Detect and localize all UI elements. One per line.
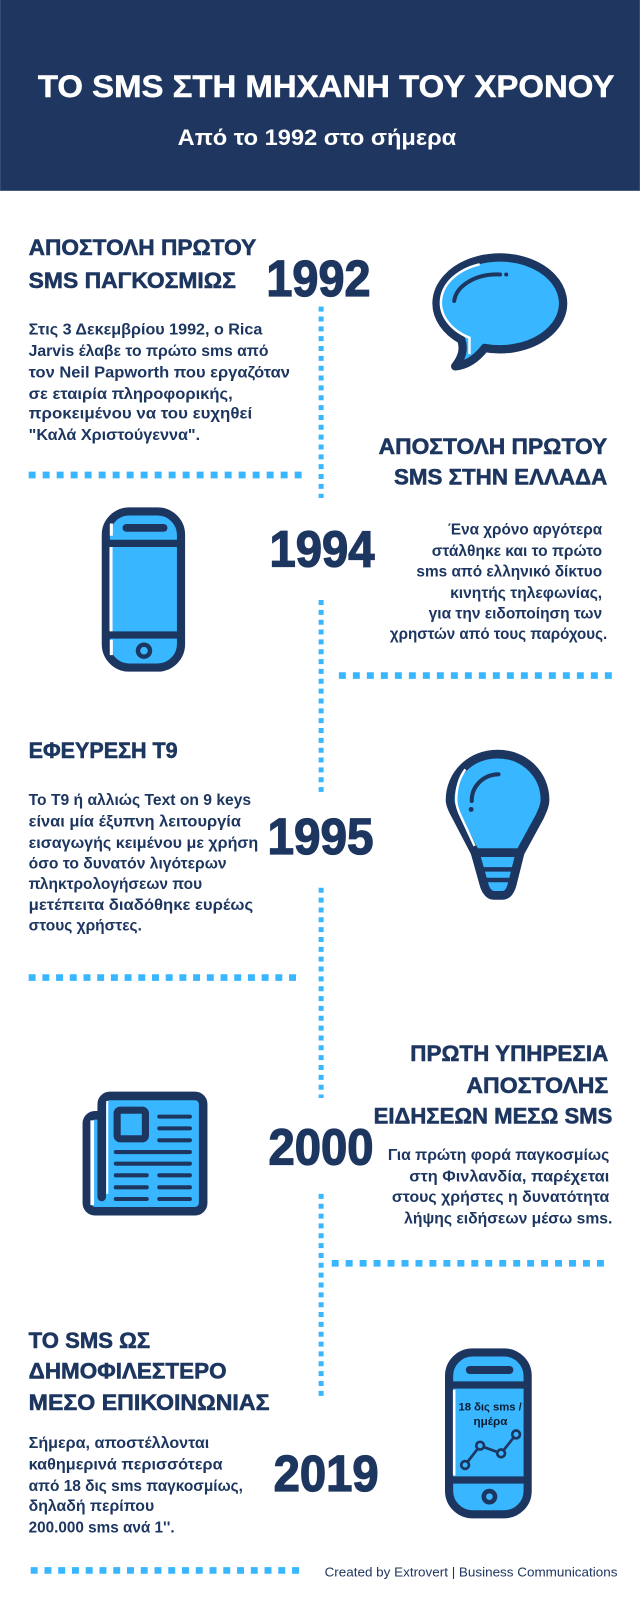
footer credit: Created by Extrovert | Business Communications — [325, 1565, 617, 1580]
heading: ΔΗΜΟΦΙΛΕΣΤΕΡΟ — [29, 1359, 227, 1384]
heading: ΑΠΟΣΤΟΛΗΣ — [466, 1073, 608, 1098]
heading: ΑΠΟΣΤΟΛΗ ΠΡΩΤΟΥ — [379, 434, 607, 459]
icon: newspaper — [87, 1096, 203, 1211]
timeline vertical segments — [319, 307, 324, 1400]
body text: Στις 3 Δεκεμβρίου 1992, ο Rica — [29, 322, 263, 339]
body text: από 18 δις sms παγκοσμίως, — [29, 1478, 243, 1495]
heading — [29, 1328, 269, 1415]
body text: δηλαδή περίπου — [29, 1498, 154, 1515]
body text: Το Τ9 ή αλλιώς Text on 9 keys — [29, 792, 251, 809]
screen label: ημέρα — [473, 1416, 508, 1428]
body text: τον Neil Papworth που εργαζόταν — [29, 365, 290, 382]
year: 1994 — [269, 520, 375, 577]
header banner — [0, 0, 640, 191]
icon: speech bubble — [437, 257, 563, 366]
icon: mobile phone — [106, 511, 181, 668]
body text: στη Φινλανδία, παρέχεται — [409, 1169, 609, 1186]
section: 1994 — [106, 434, 607, 668]
icon: light bulb — [450, 754, 545, 895]
screen label — [458, 1402, 522, 1428]
subtitle: Από το 1992 στο σήμερα — [178, 125, 456, 150]
year: 1995 — [267, 808, 374, 865]
body text: χρηστών από τους παρόχους. — [390, 626, 607, 643]
heading: ΠΡΩΤΗ ΥΠΗΡΕΣΙΑ — [410, 1041, 608, 1066]
year: 2019 — [274, 1445, 379, 1502]
horizontal dividers — [29, 475, 612, 1570]
body text: Για πρώτη φορά παγκοσμίως — [388, 1147, 609, 1164]
heading: ΤΟ SMS ΩΣ — [29, 1328, 150, 1353]
body text — [29, 1435, 243, 1537]
body text — [390, 522, 607, 643]
body text: καθημερινά περισσότερα — [29, 1456, 223, 1473]
body text — [388, 1147, 612, 1227]
body text: στους χρήστες η δυνατότητα — [392, 1189, 610, 1206]
heading: ΕΙΔΗΣΕΩΝ ΜΕΣΩ SMS — [374, 1103, 612, 1128]
heading: ΜΕΣΟ ΕΠΙΚΟΙΝΩΝΙΑΣ — [29, 1390, 269, 1415]
heading — [29, 235, 256, 293]
year: 1992 — [266, 250, 371, 307]
body text: σε εταιρία πληροφορικής, — [29, 386, 233, 403]
body text: Ένα χρόνο αργότερα — [448, 522, 603, 539]
line chart — [461, 1431, 520, 1469]
body text: κινητής τηλεφωνίας, — [450, 585, 602, 602]
year: 2000 — [268, 1118, 374, 1175]
body text — [29, 792, 258, 935]
icon: smartphone with chart — [449, 1352, 528, 1514]
heading — [374, 1041, 612, 1128]
heading: SMS ΣΤΗΝ ΕΛΛΑΔΑ — [394, 465, 607, 490]
body text: sms από ελληνικό δίκτυο — [416, 564, 602, 581]
body text: στάλθηκε και το πρώτο — [432, 543, 602, 560]
section: 1995 — [29, 738, 545, 935]
section: 2000 — [87, 1041, 612, 1227]
heading — [379, 434, 607, 490]
body text: "Καλά Χριστούγεννα". — [29, 427, 200, 444]
section: 1992 — [29, 235, 563, 444]
body text: 200.000 sms ανά 1''. — [29, 1520, 175, 1537]
heading: ΑΠΟΣΤΟΛΗ ΠΡΩΤΟΥ — [29, 235, 256, 260]
body text: Jarvis έλαβε το πρώτο sms από — [29, 343, 268, 360]
heading: SMS ΠΑΓΚΟΣΜΙΩΣ — [29, 268, 236, 293]
body text: προκειμένου να του ευχηθεί — [29, 405, 252, 422]
body text: Σήμερα, αποστέλλονται — [29, 1435, 209, 1452]
screen label: 18 δις sms / — [458, 1402, 522, 1414]
body text: μετέπειτα διαδόθηκε ευρέως — [29, 897, 253, 914]
body text: είναι μία έξυπνη λειτουργία — [29, 814, 242, 831]
body text — [29, 322, 290, 444]
body text: εισαγωγής κειμένου με χρήση — [29, 835, 258, 852]
body text: στους χρήστες. — [29, 918, 142, 935]
body text: πληκτρολογήσεων που — [29, 876, 202, 893]
section: 2019 — [29, 1328, 528, 1537]
title: ΤΟ SMS ΣΤΗ ΜΗΧΑΝΗ ΤΟΥ ΧΡΟΝΟΥ — [38, 68, 614, 104]
body text: για την ειδοποίηση των — [429, 605, 602, 622]
heading: ΕΦΕΥΡΕΣΗ Τ9 — [29, 738, 178, 763]
body text: λήψης ειδήσεων μέσω sms. — [404, 1210, 612, 1227]
body text: όσο το δυνατόν λιγότερων — [29, 855, 227, 872]
